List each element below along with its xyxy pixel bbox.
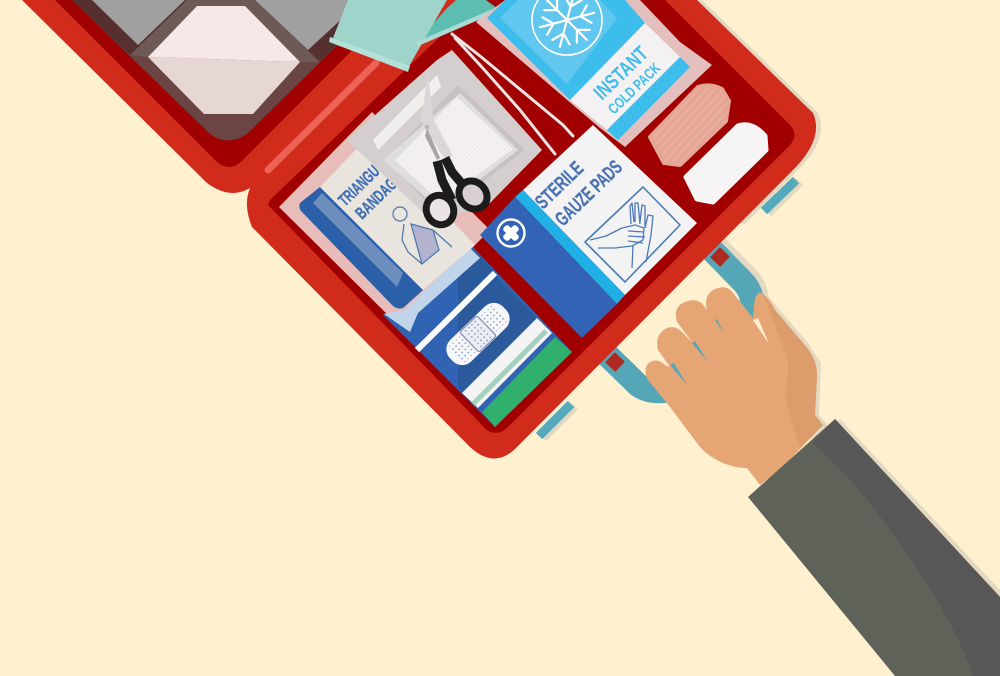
white roll xyxy=(686,125,766,202)
triangular bandage pack xyxy=(279,112,490,332)
sleeve xyxy=(748,419,1000,676)
light wrap strip xyxy=(384,248,480,332)
label: instant: INSTANT xyxy=(589,42,653,105)
blue band xyxy=(480,197,617,338)
white hexagon pad xyxy=(148,6,300,114)
hexagon frame xyxy=(130,0,320,62)
gray cushion left xyxy=(92,0,185,45)
person with sling icon xyxy=(393,207,452,264)
gauze pack xyxy=(347,50,542,222)
label: triangular: TRIANGULAR xyxy=(335,146,400,210)
label: cold pack: COLD PACK xyxy=(605,60,664,118)
label: sterile: STERILE xyxy=(531,157,588,214)
inner wrap xyxy=(385,85,525,215)
gray cushion right xyxy=(255,0,350,50)
long blade xyxy=(421,73,453,159)
washing hands icon xyxy=(585,187,680,282)
handle brackets xyxy=(605,247,730,372)
blue pack xyxy=(487,0,645,100)
bandage strip box xyxy=(383,246,572,427)
case shadow xyxy=(692,0,821,224)
label: gauze pads: GAUZE PADS xyxy=(551,156,627,231)
handles xyxy=(421,158,493,229)
white band xyxy=(570,23,680,130)
highlight bar xyxy=(268,63,376,170)
gauze square xyxy=(395,97,513,202)
sleeve dark side xyxy=(812,419,1000,676)
finger gaps xyxy=(670,318,769,385)
tweezers xyxy=(452,34,573,154)
lighter panel xyxy=(500,0,617,84)
hand shadow xyxy=(766,294,830,440)
blue box xyxy=(383,246,572,427)
peach roll xyxy=(650,85,729,165)
lower blue band xyxy=(607,57,690,140)
blue spine xyxy=(299,187,423,309)
bandage rolls xyxy=(650,85,766,202)
red shell xyxy=(22,0,816,458)
handle xyxy=(600,242,757,391)
label: bandage: BANDAGE xyxy=(352,169,407,223)
hand xyxy=(645,287,823,485)
snowflake icon xyxy=(532,0,602,55)
green band xyxy=(482,337,572,427)
scissors xyxy=(421,73,493,229)
sterile gauze pads box xyxy=(480,125,697,338)
dark box panel xyxy=(458,275,537,393)
cold pack xyxy=(476,0,712,147)
case body xyxy=(22,0,816,458)
short blade xyxy=(425,128,440,160)
darker hand side xyxy=(763,293,823,447)
white band xyxy=(462,318,552,408)
latches xyxy=(539,180,800,438)
lower interior xyxy=(268,0,794,433)
dark upper panel xyxy=(458,253,493,306)
teal cloth xyxy=(329,0,497,72)
light spine panel xyxy=(313,193,403,287)
adhesive bandage icon xyxy=(441,298,515,370)
inner light ring xyxy=(383,93,518,210)
white face xyxy=(523,125,697,295)
mint stripe xyxy=(473,331,546,404)
cyan band xyxy=(515,190,625,304)
cross badge xyxy=(498,220,524,246)
card xyxy=(320,135,475,290)
upper lid interior xyxy=(55,0,402,167)
lid lining top xyxy=(72,0,350,62)
white stripe xyxy=(417,273,495,350)
wrap xyxy=(476,0,712,147)
lid lining xyxy=(72,0,350,140)
gauze strip xyxy=(373,75,441,150)
clear wrap xyxy=(347,50,542,222)
arm and hand xyxy=(645,287,1000,676)
wrap xyxy=(279,112,490,322)
sleeve shadow xyxy=(835,419,1000,600)
